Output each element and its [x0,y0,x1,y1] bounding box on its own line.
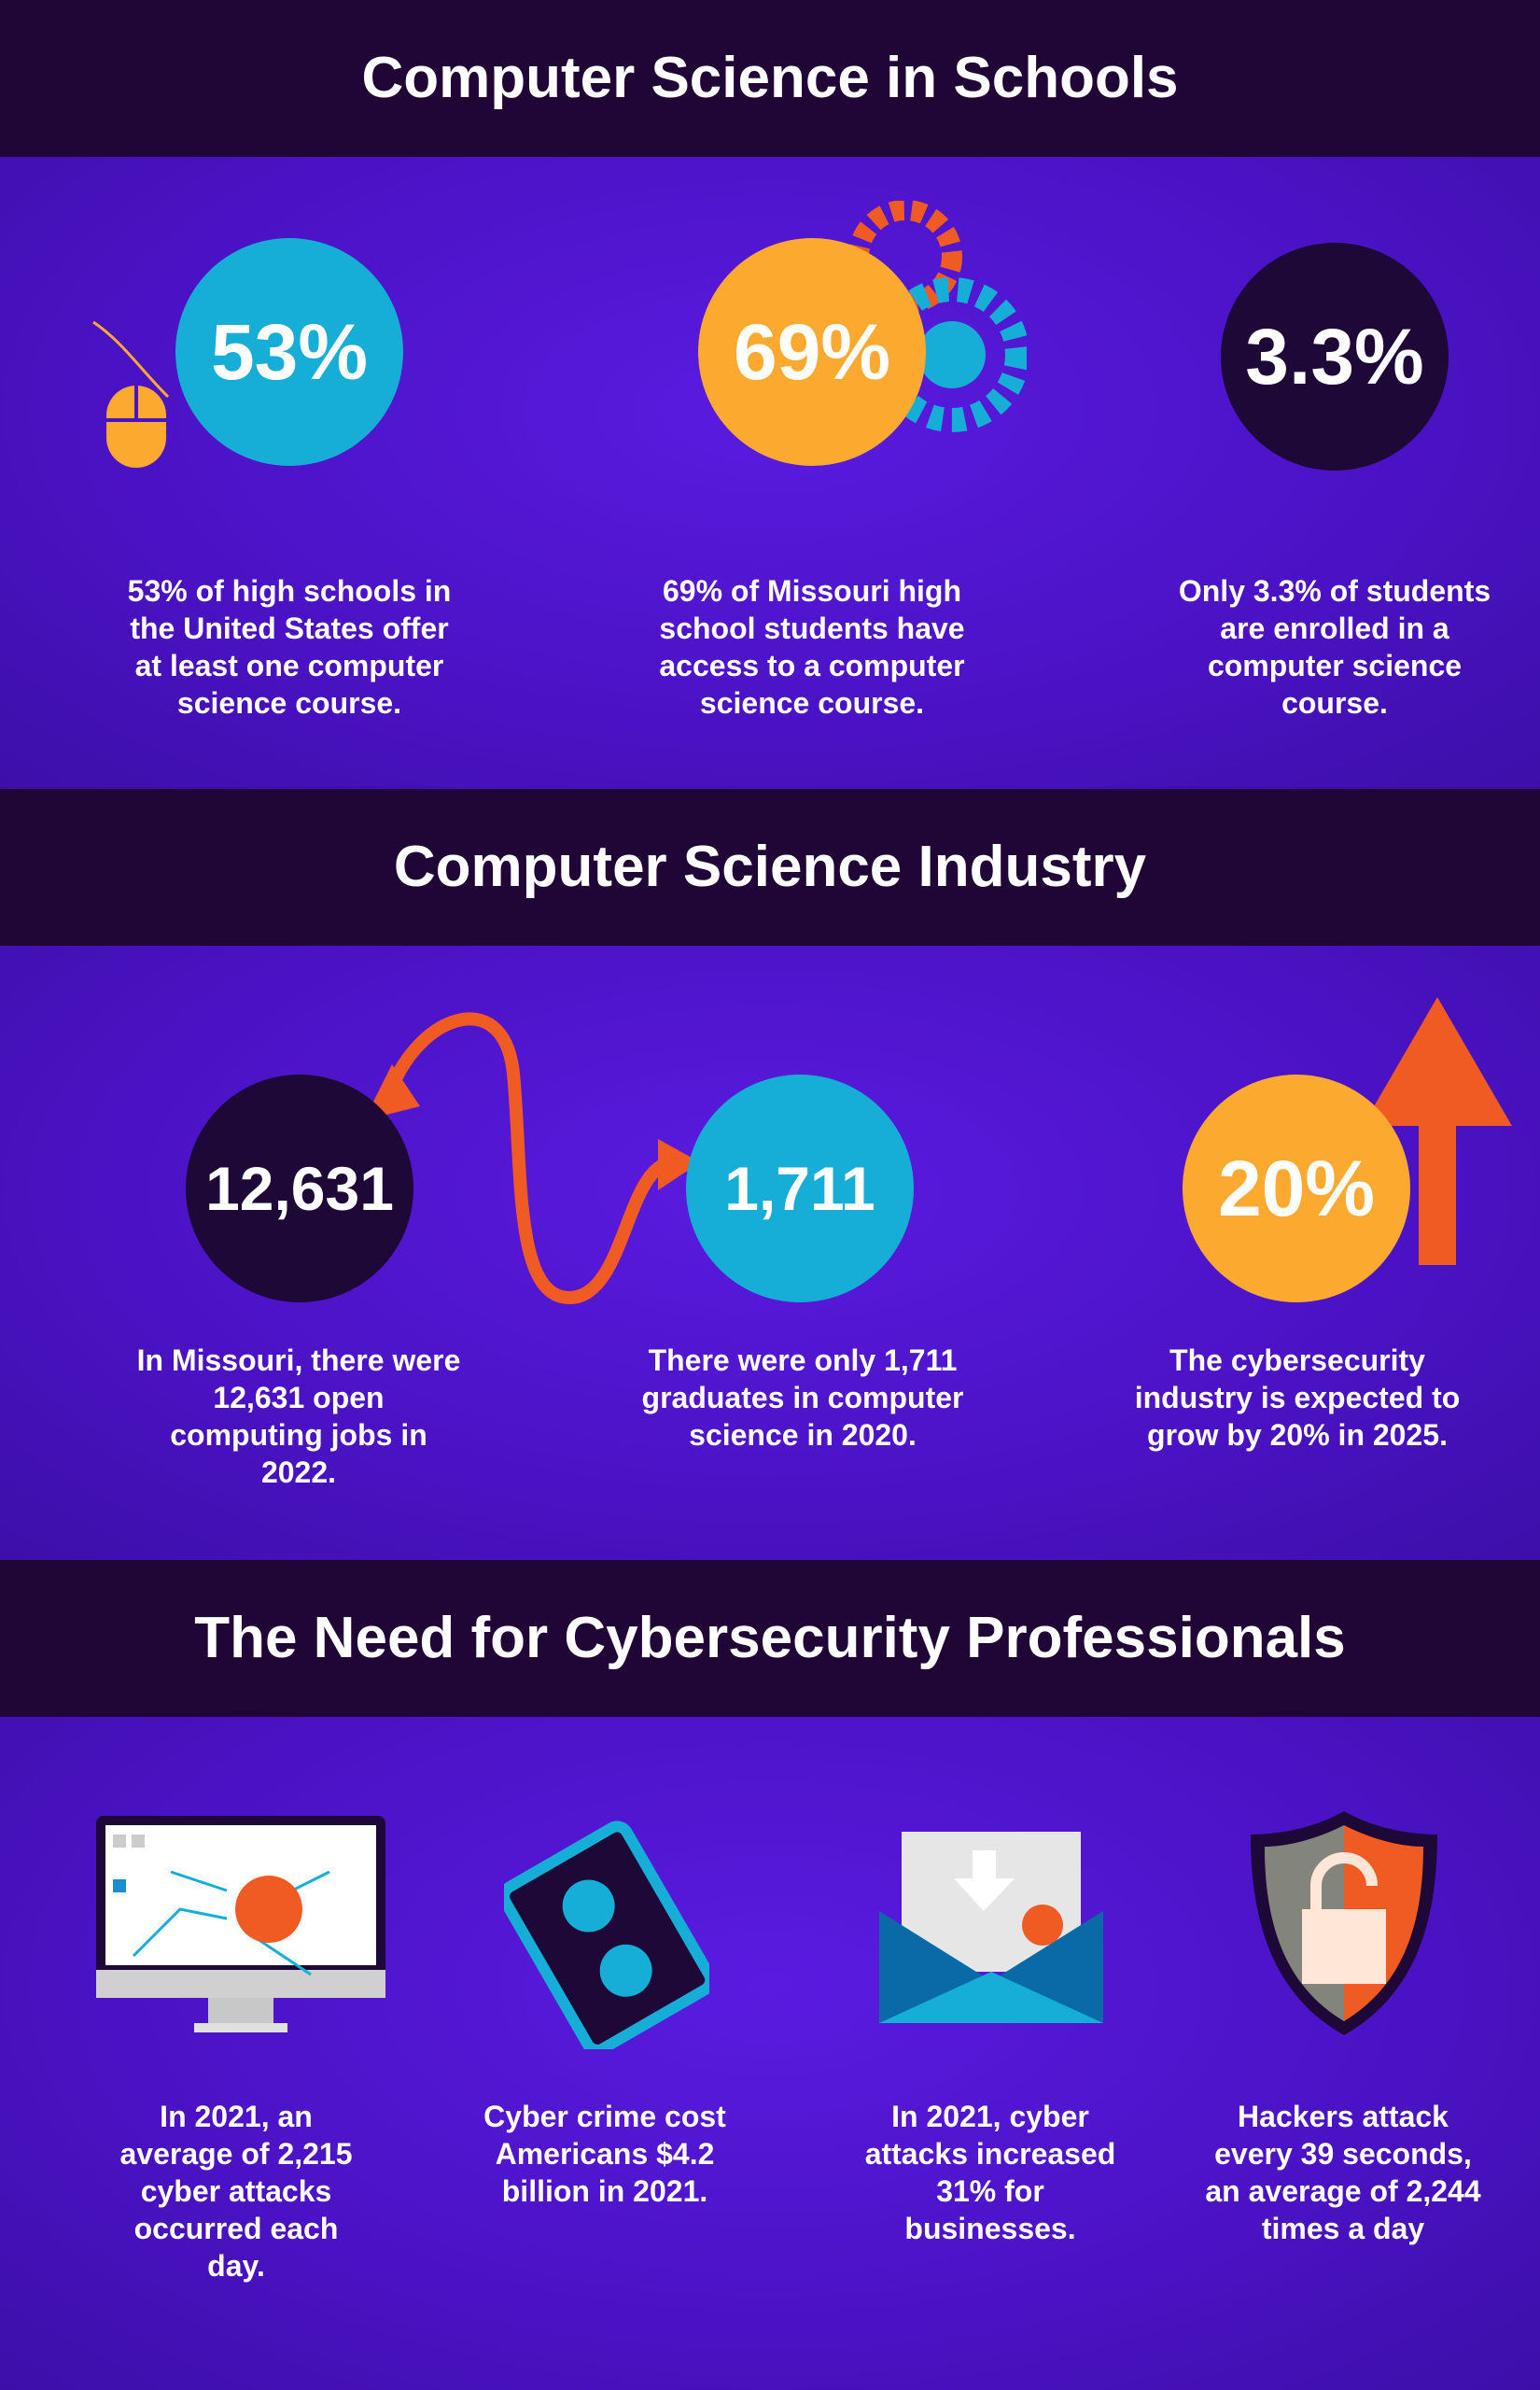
icon: shield with lock [1251,1811,1437,2035]
stat circle 69%: 69% [734,308,890,396]
stat circle 3.3%: 3.3% [1245,313,1424,401]
stat circle 20% [1183,1075,1410,1302]
text: 20%: The cybersecurity industry is expected to grow by 20% in 2025. [1135,1343,1460,1452]
text: 2,215 attacks: In 2021, an average of 2,215 cyber attacks occurred each day. [119,2100,353,2283]
text: 39 seconds: Hackers attack every 39 seconds, an average of 2,244 times a day [1205,2100,1481,2245]
stat circle 12,631 [186,1075,413,1302]
stat circle 53%: 53% [211,308,368,396]
title: The Need for Cybersecurity Professionals [0,1560,1540,1717]
text: 69%: 69% of Missouri high school students have access to a computer science course. [659,574,965,720]
text: 53%: 53% of high schools in the United States offer at least one computer science course. [128,574,451,720]
icon: mouse [92,321,169,468]
text: 12,631: computing jobs in [170,1418,427,1452]
title: Computer Science Industry: Computer Science Industry [394,835,1146,899]
stat circle 53% [175,238,403,466]
text: 1,711: There were only 1,711 graduates in computer science in 2020. [642,1343,963,1452]
text: 12,631: 12,631 open [213,1381,385,1414]
text: 12,631: In Missouri, there were [137,1343,460,1377]
stat circle 12,631: 12,631 [205,1154,394,1223]
section 1 background [0,157,1540,789]
stat circle 69% [698,238,926,466]
stat circle 3.3% [1221,243,1449,471]
text: 12,631: 2022. [261,1455,336,1489]
text: 31%: In 2021, cyber attacks increased 31% for businesses. [865,2100,1115,2245]
icon: monitor with bug [96,1816,385,2032]
title: Computer Science in Schools: Computer Science in Schools [361,46,1179,110]
section 2 background [0,946,1540,1560]
text: 3.3%: Only 3.3% of students are enrolled in a computer science course. [1179,574,1491,720]
icon: gears [849,201,1027,432]
title: Computer Science Industry [0,789,1540,946]
icon: money [504,1821,709,2049]
title: Computer Science in Schools [0,0,1540,157]
text: $4.2 billion: Cyber crime cost Americans $4.2 billion in 2021. [483,2100,726,2208]
text: 12,631 [137,1343,460,1489]
stat circle 1,711 [686,1075,914,1302]
icon: envelope with bug [879,1832,1103,2023]
arrow: up [1374,997,1512,1265]
stat circle 1,711: 1,711 [724,1154,875,1223]
stat circle 20%: 20% [1218,1145,1375,1232]
arrow: curvy [373,1012,691,1304]
section 3 background [0,1717,1540,2390]
title: The Need for Cybersecurity Professionals: The Need for Cybersecurity Professionals [194,1606,1346,1670]
